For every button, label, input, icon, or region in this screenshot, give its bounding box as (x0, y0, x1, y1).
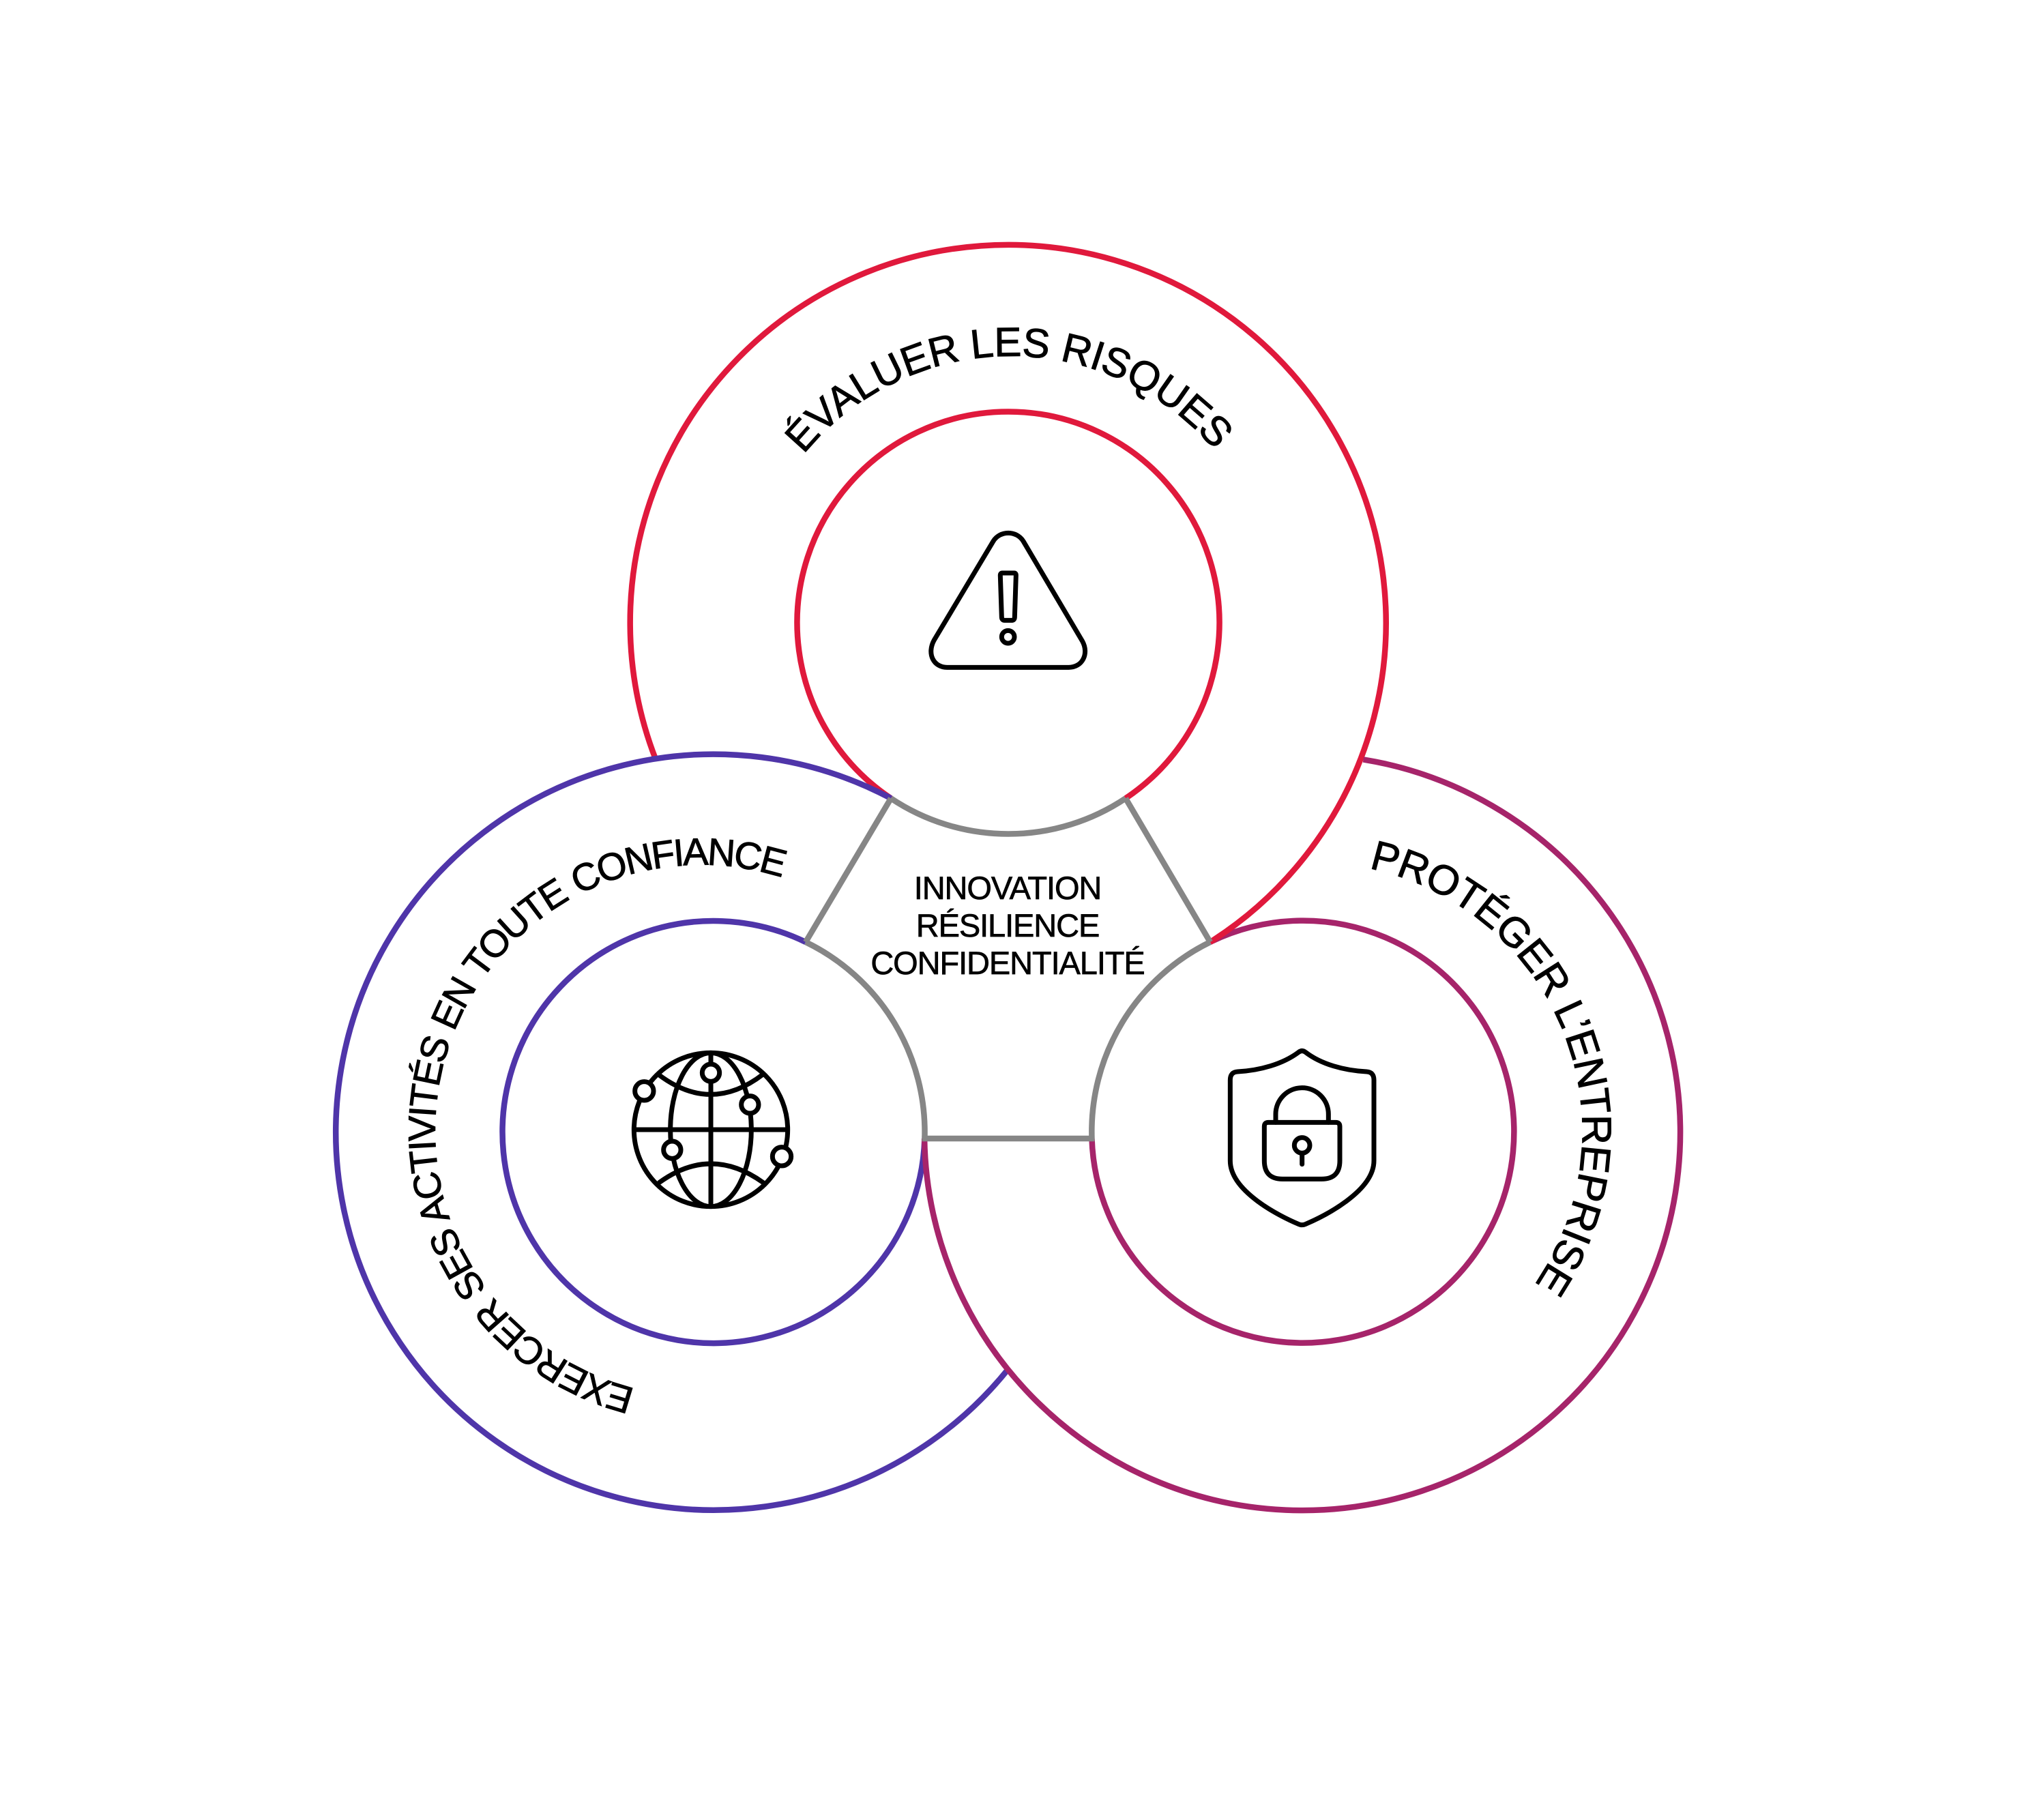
center text: values: INNOVATION (914, 870, 1101, 906)
center text: values: RÉSILIENCE (916, 907, 1099, 943)
center text: values: CONFIDENTIALITÉ (870, 945, 1145, 981)
icon: globe network (634, 1053, 791, 1207)
icon: shield with padlock (1230, 1051, 1374, 1225)
ring: évaluer outer circle (630, 245, 1386, 942)
ring: exercer inner circle (503, 921, 924, 1343)
ring: protéger inner circle (1091, 921, 1514, 1343)
heading: exercer ses activités en toute confiance: EXERCER SES ACTIVITÉS EN TOUTE CONFIANCE (408, 838, 787, 1413)
central grey hexagon outline (806, 798, 1210, 1139)
heading: protéger l'entreprise: PROTÉGER L’ENTREPRISE (1371, 840, 1611, 1297)
ring: protéger outer circle (924, 759, 1680, 1510)
heading: évaluer les risques: ÉVALUER LES RISQUES (785, 327, 1231, 452)
icon: warning triangle (931, 533, 1085, 667)
ring: évaluer inner circle (797, 411, 1220, 798)
ring: exercer outer circle (336, 754, 1008, 1510)
center text: values (870, 870, 1145, 981)
